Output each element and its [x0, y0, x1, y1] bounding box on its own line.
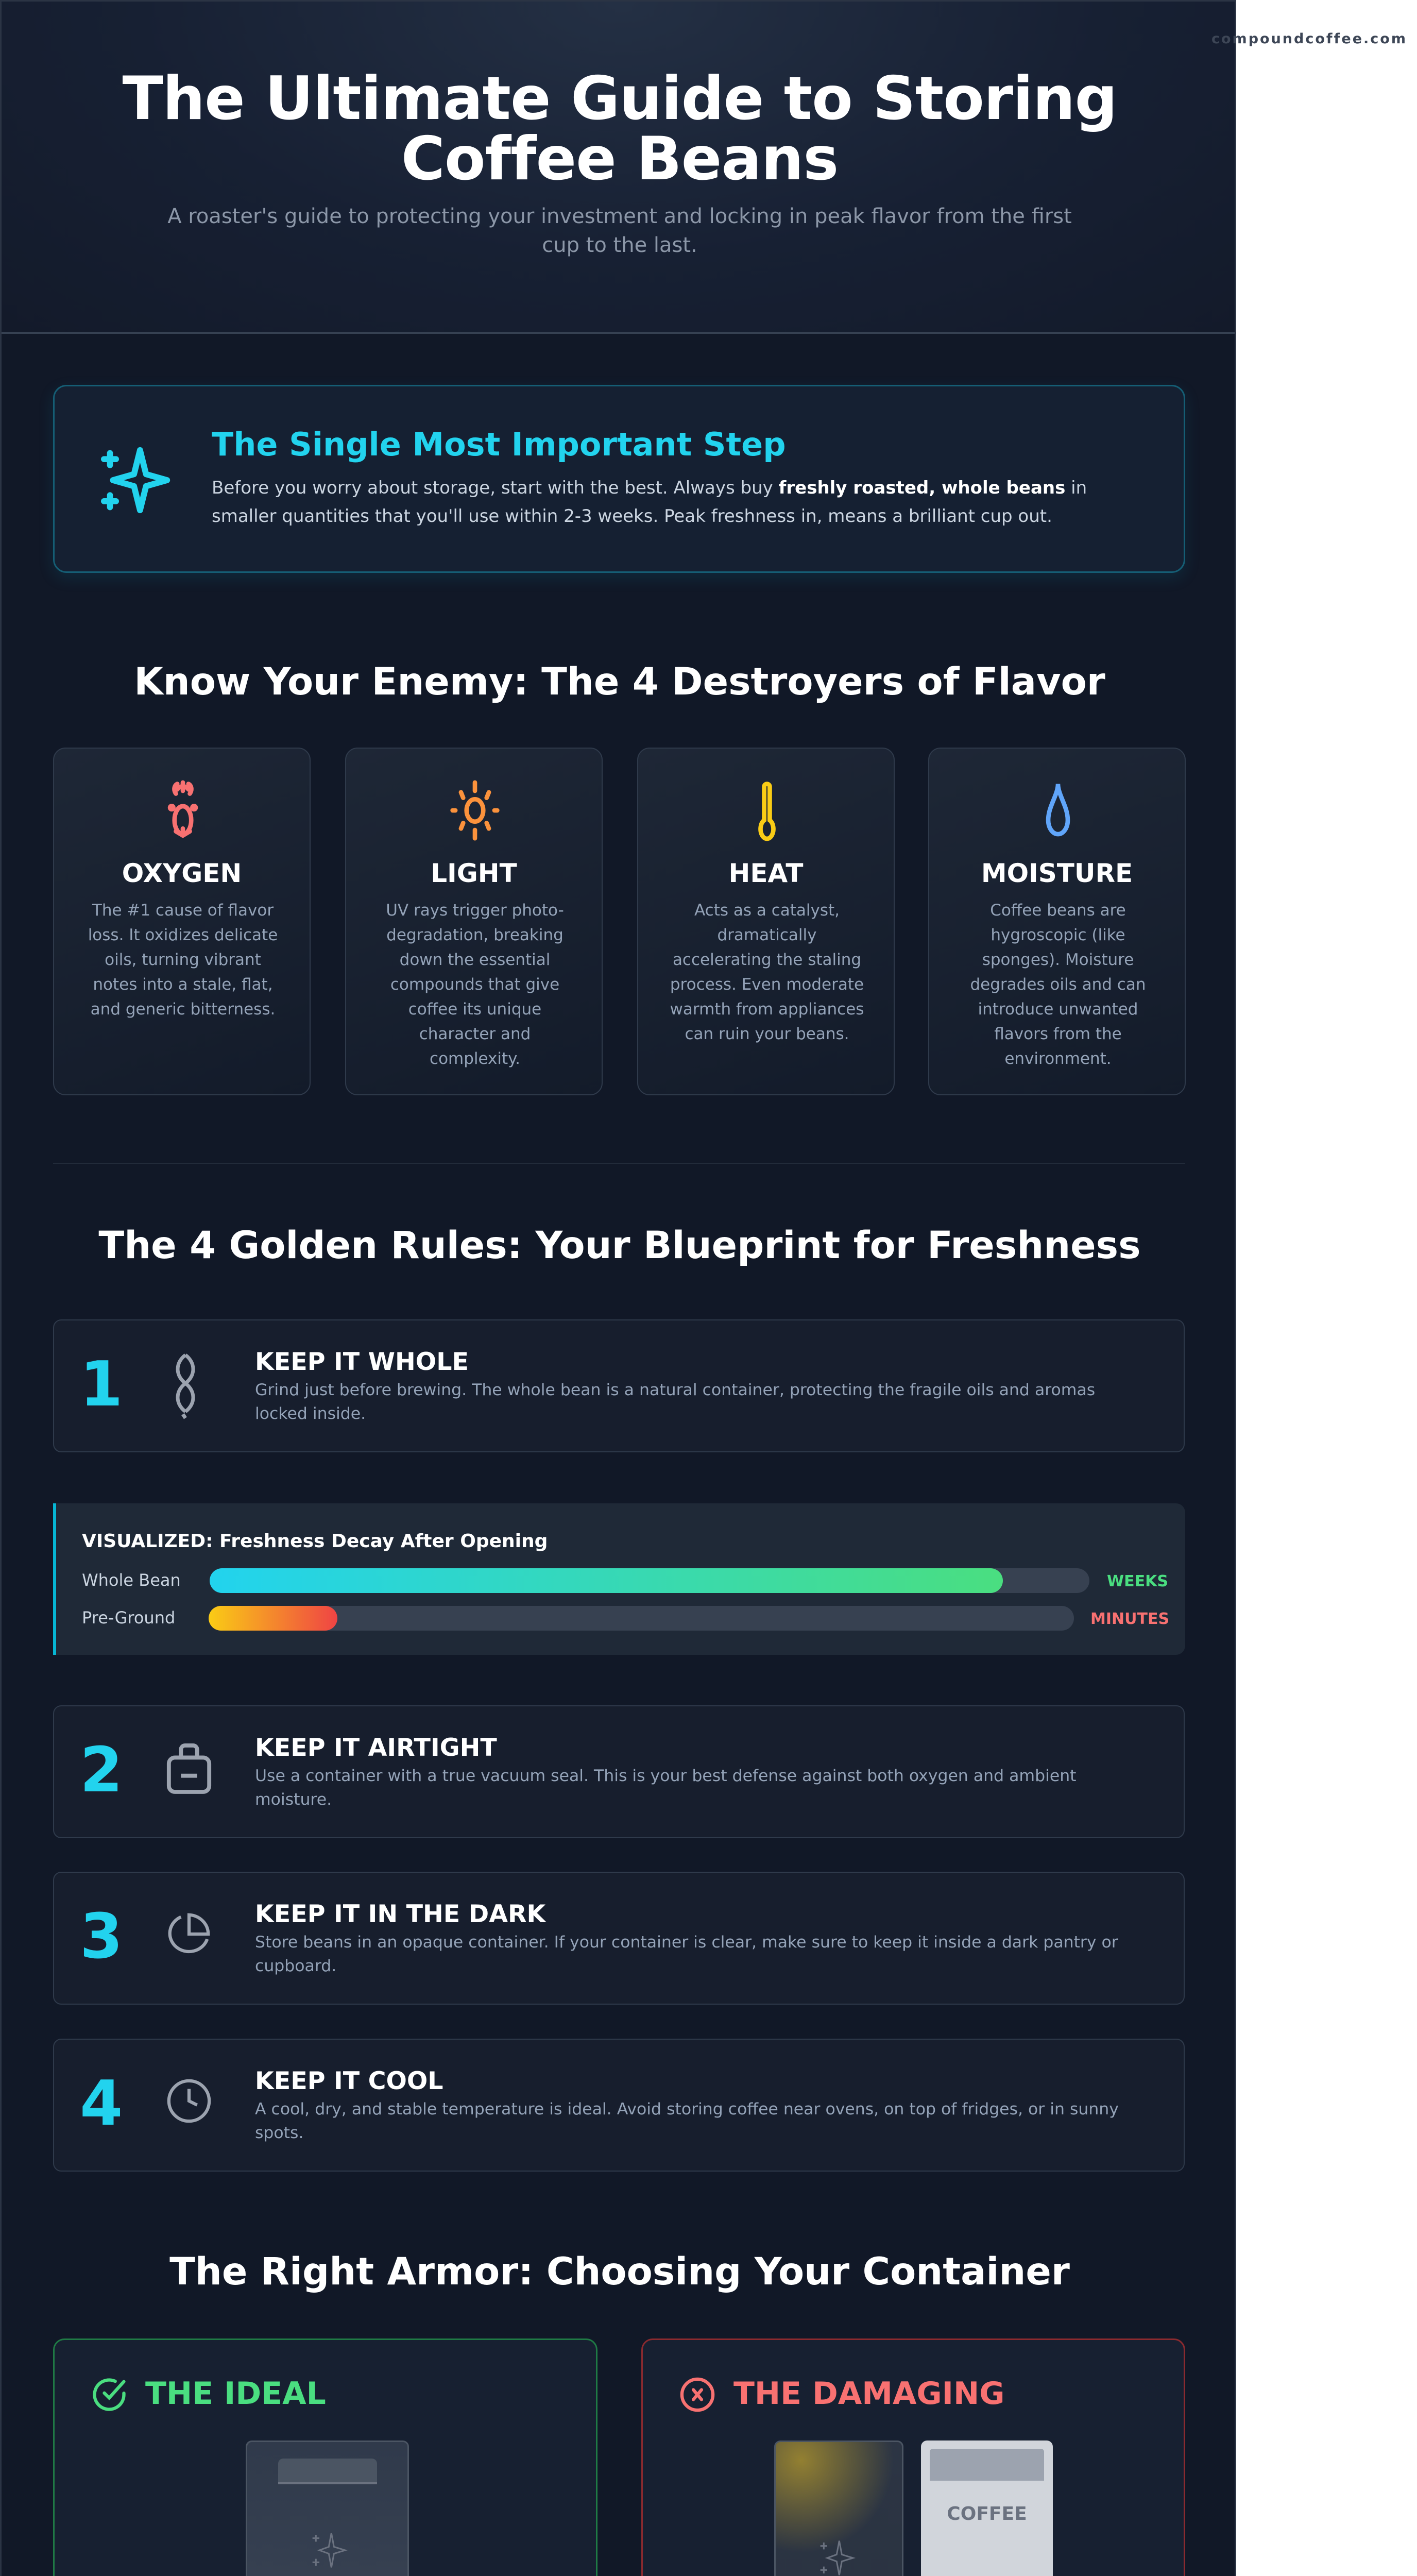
- panel: heat: HEAT: [729, 858, 803, 888]
- icon: thermometer: [758, 782, 776, 841]
- heading: know your enemy: Know Your Enemy: The 4 Destroyers of Flavor: [134, 660, 1105, 704]
- rule 1: keep it whole: [53, 1319, 1185, 1452]
- icon: pie: [168, 1913, 210, 1954]
- rule 4: keep it cool: KEEP IT COOL: [255, 2067, 443, 2095]
- rule 3: keep it in the dark: Store beans in an opaque container. If your container is clear, make sure to keep it inside a dark pantry or cupboard.: [255, 1933, 1118, 1975]
- bar: whole bean: WEEKS: [1107, 1572, 1168, 1590]
- rule 1: keep it whole: 1: [80, 1349, 123, 1420]
- rule 1: keep it whole: Grind just before brewing. The whole bean is a natural container, protecting the fragile oils and aromas locked inside.: [255, 1381, 1095, 1423]
- panel: moisture: Coffee beans are hygroscopic (like sponges). Moisture degrades oils and can introduce unwanted flavors from the environment.: [970, 901, 1146, 1068]
- icon: sparkle: [101, 447, 170, 513]
- rule 2: keep it airtight: 2: [80, 1735, 123, 1806]
- title: The Ultimate Guide to Storing: [122, 64, 1117, 133]
- bar: pre-ground: MINUTES: [1090, 1610, 1169, 1628]
- ideal heading: [93, 2376, 326, 2412]
- icon: bean: [176, 1353, 195, 1419]
- panel: moisture: MOISTURE: [981, 858, 1133, 888]
- panel: oxygen: The #1 cause of flavor loss. It oxidizes delicate oils, turning vibrant notes into a stale, flat, and generic bitterness.: [88, 901, 278, 1019]
- callout heading: The Single Most Important Step: [212, 426, 786, 463]
- panel: the ideal: THE IDEAL: [145, 2376, 326, 2412]
- icon: clock: [167, 2079, 211, 2123]
- bar: pre-ground: Pre-Ground: [82, 1608, 175, 1628]
- icon: bag/lock: [167, 1743, 211, 1794]
- icon: clear jar: [774, 2441, 903, 2576]
- panel: heat: [637, 748, 895, 1095]
- rule 2: keep it airtight: Use a container with a true vacuum seal. This is your best defense against both oxygen and ambient moisture.: [255, 1767, 1077, 1809]
- rule 3: keep it in the dark: [53, 1872, 1185, 2005]
- rule 2: keep it airtight: [53, 1705, 1185, 1838]
- rule 2: keep it airtight: KEEP IT AIRTIGHT: [255, 1734, 497, 1762]
- panel: oxygen: [53, 748, 311, 1095]
- panel: oxygen: OXYGEN: [122, 858, 242, 888]
- heading: right armor: The Right Armor: Choosing Your Container: [169, 2250, 1070, 2294]
- chart heading: VISUALIZED: Freshness Decay After Opening: [82, 1531, 548, 1552]
- panel: light: [345, 748, 603, 1095]
- rule 3: keep it in the dark: KEEP IT IN THE DARK: [255, 1900, 545, 1928]
- subtitle: A roaster's guide to protecting your investment and locking in peak flavor from the first cup to the last.: [167, 205, 1072, 257]
- panel: light: UV rays trigger photo-degradation, breaking down the essential compounds that give coffee its unique character and complexity.: [386, 901, 564, 1068]
- heading: golden rules: The 4 Golden Rules: Your Blueprint for Freshness: [98, 1224, 1141, 1267]
- icon: water drop: [1046, 784, 1070, 837]
- damaging heading: [680, 2376, 1004, 2412]
- bar: pre-ground: [82, 1606, 1169, 1631]
- panel: light: LIGHT: [431, 858, 517, 888]
- watermark: compoundcoffee.com: [1211, 31, 1407, 47]
- icon: coffee bag: [921, 2441, 1053, 2576]
- icon: sun: [450, 780, 500, 841]
- icon: coffee bag: COFFEE: [947, 2503, 1027, 2524]
- panel: moisture: [928, 748, 1186, 1095]
- panel: heat: Acts as a catalyst, dramatically accelerating the staling process. Even moderate warmth from appliances can ruin your beans.: [670, 901, 864, 1043]
- callout: single most important step: [53, 385, 1185, 573]
- rule 4: keep it cool: 4: [80, 2068, 123, 2140]
- title: Coffee Beans: [401, 124, 838, 194]
- bar chart: freshness decay: [53, 1503, 1185, 1655]
- icon: oxygen: [168, 780, 198, 838]
- callout text: Before you worry about storage, start with the best. Always buy freshly roasted, whole beans in smaller quantities that you'll use within 2-3 weeks. Peak freshness in, means a brilliant cup out.: [212, 478, 1087, 527]
- rule 4: keep it cool: [53, 2039, 1185, 2172]
- rule 4: keep it cool: A cool, dry, and stable temperature is ideal. Avoid storing coffee near ovens, on top of fridges, or in sunny spots.: [255, 2100, 1119, 2142]
- bar: whole bean: [82, 1568, 1168, 1593]
- panel: the damaging: [641, 2338, 1185, 2576]
- title: [122, 64, 1117, 194]
- panel: the ideal: [53, 2338, 597, 2576]
- bar: whole bean: Whole Bean: [82, 1570, 181, 1590]
- rule 1: keep it whole: KEEP IT WHOLE: [255, 1348, 469, 1376]
- rule 3: keep it in the dark: 3: [80, 1901, 123, 1973]
- header: [2, 2, 1238, 334]
- panel: the damaging: THE DAMAGING: [733, 2376, 1004, 2412]
- icon: opaque container: [246, 2441, 409, 2576]
